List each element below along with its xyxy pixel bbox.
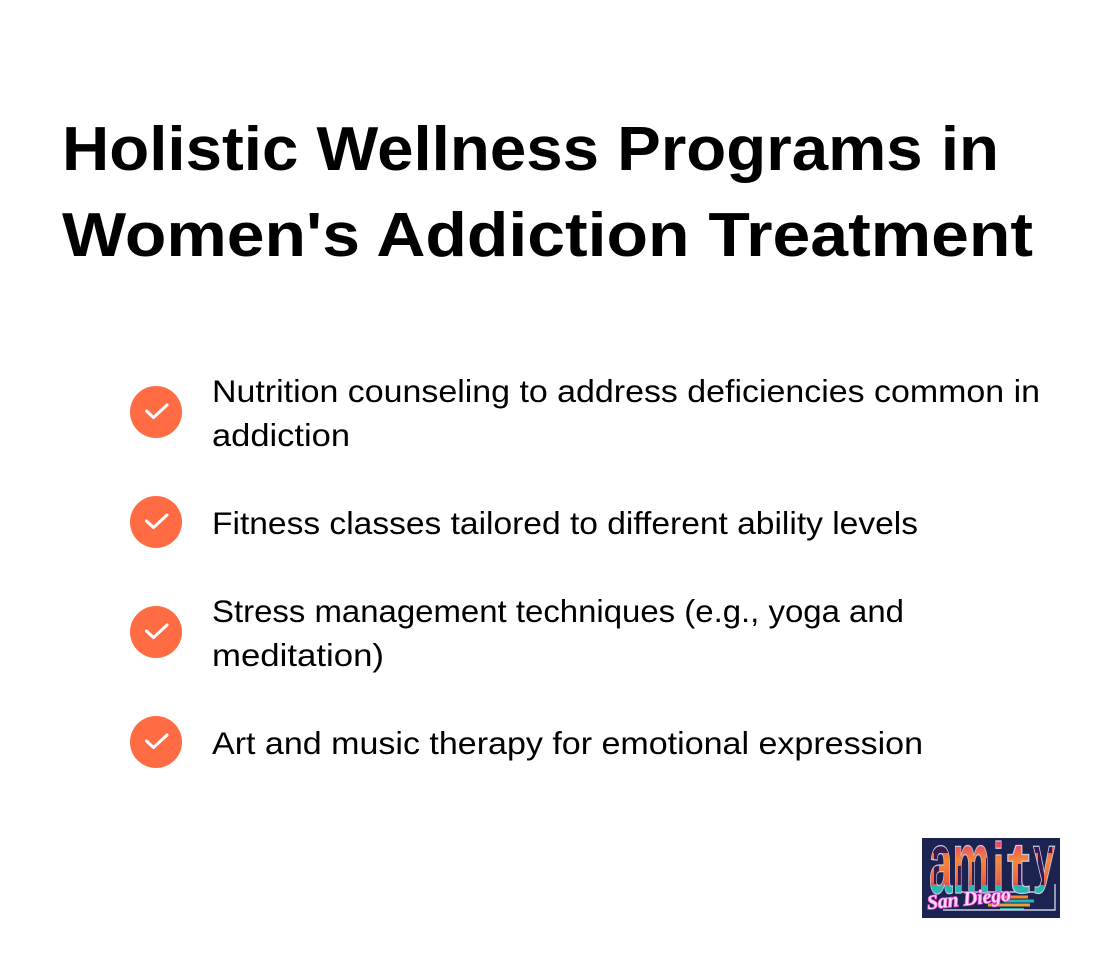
logo wordmark: y — [1033, 822, 1055, 894]
logo base stripes — [943, 884, 1055, 910]
item: stress management — [130, 593, 904, 673]
icon: check badge — [130, 496, 182, 548]
text: stress management: meditation) — [212, 637, 384, 673]
text: fitness classes: Fitness classes tailored to different ability levels — [212, 505, 918, 541]
logo wordmark: i — [993, 830, 1004, 909]
icon: check badge — [130, 716, 182, 768]
logo wordmark: am — [929, 813, 990, 912]
icon: check badge — [130, 606, 182, 658]
checklist — [130, 373, 1040, 768]
text: stress management — [212, 593, 904, 673]
logo script: San Diego: San Diego — [926, 884, 1012, 914]
title: Holistic Wellness Programs in — [62, 115, 999, 184]
title: Women's Addiction Treatment — [62, 201, 1033, 270]
text: nutrition counseling — [212, 373, 1040, 453]
text: nutrition counseling: Nutrition counseling to address deficiencies common in — [212, 373, 1040, 409]
text: nutrition counseling: addiction — [212, 417, 350, 453]
title — [62, 115, 1033, 270]
icon: check badge — [130, 386, 182, 438]
logo: Amity San Diego — [922, 813, 1060, 918]
item: nutrition counseling — [130, 373, 1040, 453]
logo wordmark: t — [1007, 829, 1030, 909]
text: art and music therapy: Art and music therapy for emotional expression — [212, 725, 923, 761]
text: stress management: Stress management techniques (e.g., yoga and — [212, 593, 904, 629]
item: art and music therapy — [130, 716, 923, 768]
item: fitness classes — [130, 496, 918, 548]
